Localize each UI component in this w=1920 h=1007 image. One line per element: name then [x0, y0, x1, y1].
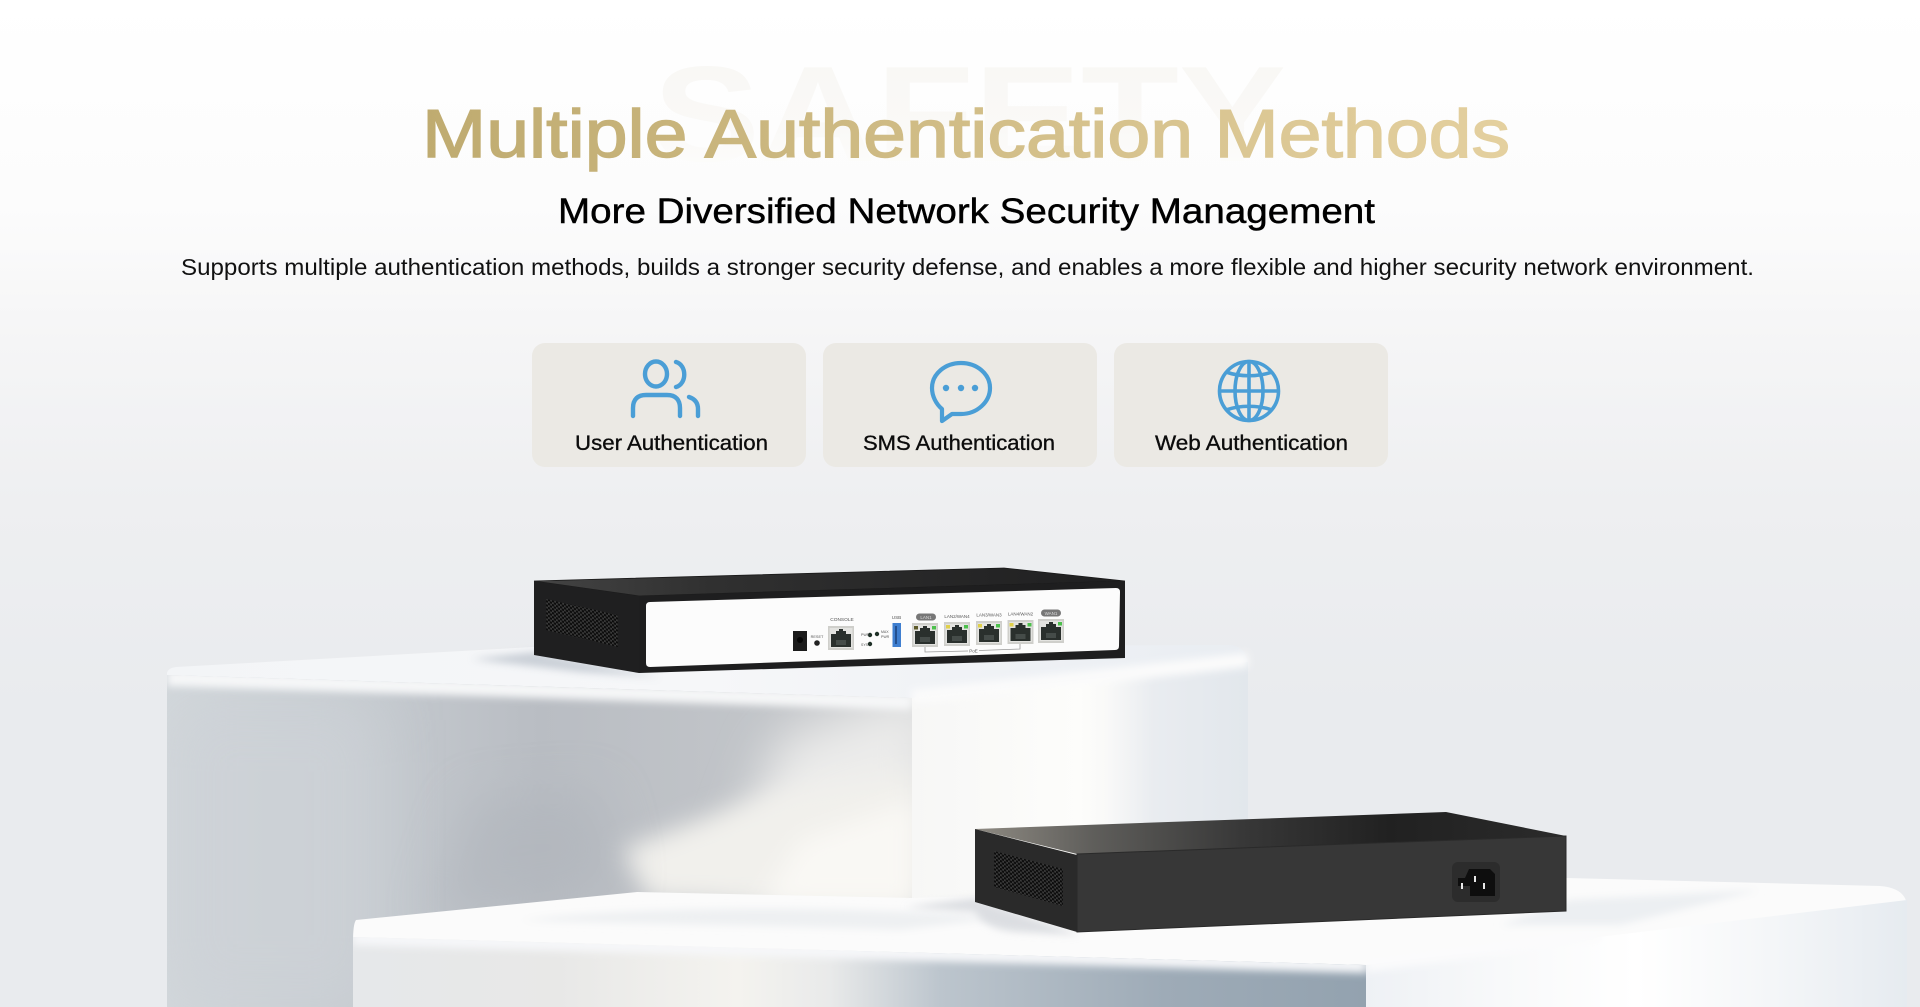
lan 4: [1008, 612, 1034, 644]
subtitle: More Diversified Network Security Management: [558, 192, 1375, 231]
power socket: [1452, 862, 1500, 902]
left side soft tint: [167, 700, 380, 1007]
pedestal right face: [912, 662, 1248, 920]
description text: Supports multiple authentication methods, builds a stronger security defense, and enables a more flexible and higher security network environment.: [181, 254, 1754, 280]
power jack: [793, 631, 807, 651]
top panel: [534, 568, 1125, 596]
pedestal top face: [353, 878, 1907, 968]
icon: chat bubble: [932, 363, 990, 421]
lan 4: LAN4/WAN2: [1008, 612, 1034, 616]
watermark word: SAFETY: SAFETY: [653, 38, 1286, 190]
side vent: [994, 851, 1063, 906]
pedestal top face: [167, 645, 1248, 712]
status leds: MAX: [881, 630, 889, 634]
label: SMS Authentication: [863, 432, 1055, 455]
front panel: [639, 581, 1125, 673]
right corner soft edge: [1366, 935, 1600, 966]
front face: [353, 937, 1366, 1007]
status leds: [861, 630, 890, 647]
lan 2: [944, 614, 970, 646]
light patch on front face: [618, 791, 788, 895]
card: sms authentication: [823, 343, 1097, 467]
back white pedestal: [167, 645, 1248, 1007]
lan 2: LAN2/WAN4: [944, 614, 970, 619]
status leds: PWR: [881, 635, 890, 639]
card: web authentication: [1114, 343, 1388, 467]
front face top edge glow: [167, 678, 912, 702]
icon: users: [633, 362, 698, 416]
back-right gloom on top face: [1500, 890, 1760, 925]
icon: globe: [1220, 361, 1278, 421]
dark area left of light patch: [430, 790, 620, 920]
wan port: WAN1: [1045, 611, 1058, 616]
poe bracket: [925, 644, 1020, 654]
lan 3: LAN3/WAN3: [976, 612, 1002, 618]
front white pedestal: [353, 878, 1907, 1007]
lan 1: [912, 614, 938, 647]
side panel: [975, 829, 1077, 932]
bright corner: [776, 827, 912, 898]
status leds: PWR: [861, 633, 870, 637]
usb port: USB: [892, 615, 901, 620]
side panel: [534, 581, 639, 673]
right face: [1366, 900, 1907, 1007]
top face soft shade: [520, 908, 1000, 930]
label: Web Authentication: [1155, 432, 1348, 455]
card: user authentication: [532, 343, 806, 467]
lan 1: LAN1: [920, 615, 932, 620]
reset button: [811, 635, 824, 646]
side vent: [546, 599, 618, 647]
pedestal corner highlight: [912, 660, 1248, 697]
shadow under switch: [904, 898, 1080, 935]
label: User Authentication: [575, 432, 768, 455]
diffuse light on front face: [741, 708, 912, 803]
poe bracket: PoE: [969, 648, 978, 654]
rear panel: [1077, 836, 1566, 932]
pedestal front face: [167, 670, 930, 1007]
front face top edge glow: [353, 938, 1366, 966]
status leds: SYS: [861, 643, 869, 647]
white faceplate: [646, 588, 1120, 667]
console port: CONSOLE: [830, 617, 854, 623]
top panel: [975, 812, 1566, 854]
console port: [828, 617, 854, 650]
device: switch rear view: [975, 812, 1566, 932]
lan 3: [976, 612, 1002, 645]
usb port: [892, 615, 901, 647]
shadow under router: [471, 652, 660, 677]
wan port: [1038, 610, 1064, 643]
device: router front view: [534, 568, 1125, 673]
title: Multiple Authentication Methods: [422, 96, 1510, 172]
reset button: RESET: [811, 635, 824, 639]
